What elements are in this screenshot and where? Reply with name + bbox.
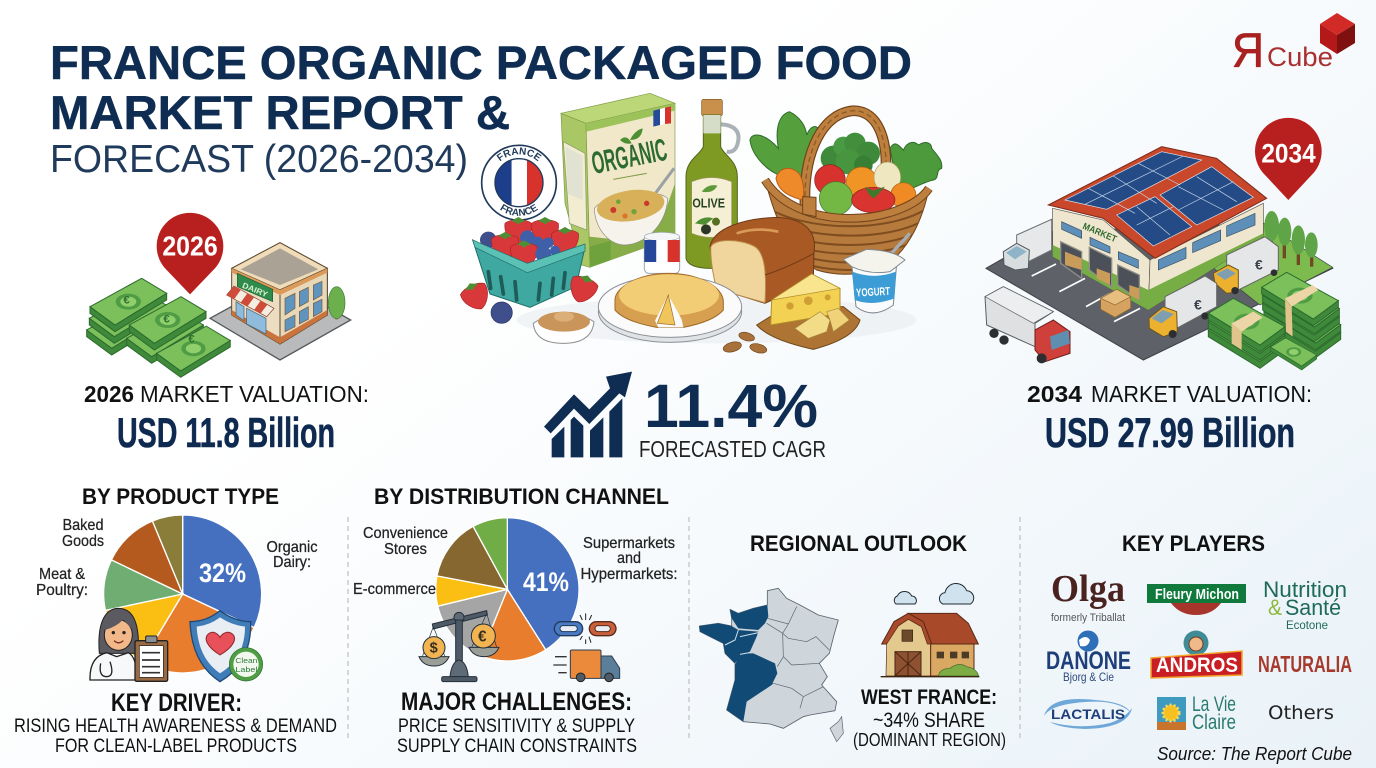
icon: money stacks (1208, 272, 1341, 370)
logo: Danone: DANONE (1046, 647, 1131, 675)
icon: shield with heart: Clean (235, 656, 257, 665)
major challenges: MAJOR CHALLENGES: (401, 688, 632, 716)
icon: vegetable basket (750, 111, 942, 274)
icon: delivery truck (553, 650, 620, 682)
logo: Fleury Michon: Fleury Michon (1155, 586, 1239, 603)
icon: store (210, 243, 351, 360)
icon: France badge: FRANCE (500, 204, 538, 216)
label: convenience stores: Stores (384, 541, 427, 558)
heading: KEY PLAYERS (1122, 531, 1265, 556)
label: convenience stores (363, 525, 448, 558)
stat: 2026 valuation (84, 381, 369, 456)
logo: La Vie Claire: Claire (1192, 711, 1236, 734)
icon: balance scale with coins: $ (430, 641, 438, 657)
illustration: 2026 store with money (87, 213, 351, 377)
stat: 2034 valuation: MARKET VALUATION: (1091, 381, 1312, 407)
west france stat: (DOMINANT REGION) (853, 730, 1006, 750)
logo: Olga: formerly Triballat (1051, 612, 1125, 624)
label: supermarkets and hypermarkets (580, 535, 678, 583)
icon: balance scale with coins: € (478, 628, 487, 645)
icon: warehouse building (1048, 147, 1267, 310)
stat: 2026 valuation: 2026 (84, 381, 134, 407)
icon: yellow trucks: € (1255, 256, 1263, 272)
icon: olive oil bottle: OLIVE (692, 197, 725, 211)
icon: balance scale with coins (419, 611, 499, 682)
stat: 2026 valuation: MARKET VALUATION: (140, 381, 369, 407)
icon: yellow trucks (1149, 237, 1278, 338)
icon: euro bill stacks (87, 278, 230, 377)
icon: trees (1264, 211, 1318, 267)
logo: Lactalis (1044, 699, 1132, 729)
label: meat and poultry (36, 566, 88, 599)
icon: shield with heart (190, 611, 263, 682)
stat: 2034 valuation (1027, 381, 1312, 456)
major challenges: PRICE SENSITIVITY & SUPPLY (398, 716, 635, 737)
icon: barn with clouds (881, 583, 979, 677)
logo: Nutrition & Santé (1263, 577, 1347, 632)
label: e-commerce: E-commerce (353, 581, 436, 598)
icon: olive oil bottle (686, 99, 739, 268)
pie chart: distribution channel (436, 518, 579, 661)
logo: RCube: Я (1232, 25, 1264, 78)
heading: BY DISTRIBUTION CHANNEL (374, 484, 669, 509)
panel: by product type (14, 484, 337, 757)
panel: by distribution channel (353, 484, 678, 757)
icon: yogurt cup (843, 233, 910, 313)
stat: CAGR: FORECASTED CAGR (639, 436, 826, 462)
logo: Nutrition & Santé: Santé (1285, 595, 1341, 620)
heading: REGIONAL OUTLOOK (750, 531, 967, 556)
panel: key players (1044, 531, 1352, 764)
logo: Andros (1151, 630, 1242, 678)
logo: Nutrition & Santé: Nutrition (1263, 577, 1347, 602)
icon: back truck (1003, 219, 1052, 270)
title: MARKET REPORT & (50, 86, 510, 139)
panel: regional outlook (699, 531, 1006, 750)
logo: La Vie Claire: La Vie (1192, 693, 1236, 716)
label: organic dairy: Organic (266, 539, 318, 556)
label: supermarkets and hypermarkets: Supermarkets (583, 535, 675, 552)
logo: Fleury Michon (1147, 584, 1246, 615)
logo: Olga: Olga (1051, 568, 1125, 610)
label: meat and poultry: Poultry: (36, 582, 88, 599)
west france stat: WEST FRANCE: (861, 686, 997, 709)
pie chart: product type (104, 515, 262, 673)
icon: 2026 pin: 2026 (162, 230, 218, 261)
icon: yogurt cup: YOGURT (856, 286, 890, 300)
icon: warehouse building: MARKET (1081, 221, 1119, 244)
icon: French flag jar (644, 232, 680, 273)
icon: shield with heart: Label (235, 665, 258, 674)
label: convenience stores: Convenience (363, 525, 448, 542)
slice label: 32% (199, 558, 246, 588)
label: baked goods: Goods (62, 533, 104, 550)
stat: CAGR (544, 372, 826, 462)
icon: broken chain (554, 613, 616, 644)
icon: bowl of spread (533, 312, 594, 343)
title: FORECAST (2026-2034) (50, 138, 468, 181)
logo: Lactalis: LACTALIS (1051, 706, 1125, 722)
icon: berry basket (458, 217, 600, 323)
label: supermarkets and hypermarkets: Hypermarkets: (580, 566, 678, 583)
icon: organic cereal box (561, 93, 675, 267)
logo: Nutrition & Santé: Ecotone (1286, 620, 1328, 632)
logo: Danone (1046, 630, 1131, 684)
icon: yellow trucks: € (1194, 296, 1202, 312)
icon: bread loaf (710, 217, 814, 303)
label: baked goods: Baked (62, 517, 104, 534)
icon: tart on plate (598, 273, 742, 342)
label: supermarkets and hypermarkets: and (617, 550, 641, 567)
source: Source: The Report Cube (1157, 744, 1352, 764)
icon: euro bill stacks: € (163, 314, 170, 326)
key driver: RISING HEALTH AWARENESS & DEMAND (14, 716, 337, 737)
icon: red truck (985, 287, 1070, 363)
icon: France badge (480, 144, 558, 220)
icon: doctor and clipboard (90, 608, 168, 681)
title: FRANCE ORGANIC PACKAGED FOOD (50, 36, 912, 89)
icon: 2034 pin (1255, 118, 1322, 200)
logo: La Vie Claire (1157, 693, 1236, 734)
logo: Nutrition & Santé: & (1268, 595, 1282, 620)
logo: Danone: Bjorg & Cie (1063, 670, 1114, 684)
label: meat and poultry: Meat & (39, 566, 85, 583)
major challenges: SUPPLY CHAIN CONSTRAINTS (397, 736, 637, 757)
icon: cheese on board (757, 274, 860, 349)
icon: France badge: FRANCE (496, 147, 542, 162)
label: organic dairy: Dairy: (273, 554, 311, 571)
heading: BY PRODUCT TYPE (82, 484, 279, 509)
icon: store: DAIRY (241, 281, 270, 299)
icon: 2034 pin: 2034 (1261, 138, 1316, 168)
slice label: 41% (523, 567, 569, 597)
icon: growth chart arrow (544, 372, 632, 457)
icon: euro bill stacks: € (188, 334, 195, 346)
stat: 2026 valuation: USD 11.8 Billion (117, 409, 335, 456)
logo: RCube: Cube (1267, 42, 1333, 72)
title (50, 36, 912, 181)
logo: Andros: ANDROS (1156, 654, 1238, 677)
key driver (14, 689, 337, 757)
stat: 2034 valuation: 2034 (1027, 381, 1082, 407)
key driver: FOR CLEAN-LABEL PRODUCTS (55, 736, 297, 757)
major challenges (397, 688, 637, 757)
map: France regions (699, 588, 843, 742)
icon: boxes (1101, 289, 1131, 317)
label: baked goods (62, 517, 104, 550)
logo: RCube (1232, 13, 1355, 78)
icon: euro bill stacks: € (123, 294, 130, 306)
stat: CAGR: 11.4% (644, 372, 818, 440)
illustration: organic food group (460, 93, 942, 354)
icon: ground (986, 223, 1333, 360)
icon: almonds (722, 331, 768, 355)
label: others: Others (1268, 702, 1334, 724)
west france stat (853, 686, 1006, 750)
key driver: KEY DRIVER: (111, 689, 242, 717)
icon: organic cereal box: ORGANIC (589, 132, 670, 181)
icon: 2026 pin (157, 213, 223, 294)
west france stat: ~34% SHARE (873, 709, 985, 732)
illustration: 2034 warehouse with money (985, 118, 1341, 370)
label: organic dairy (266, 539, 318, 571)
